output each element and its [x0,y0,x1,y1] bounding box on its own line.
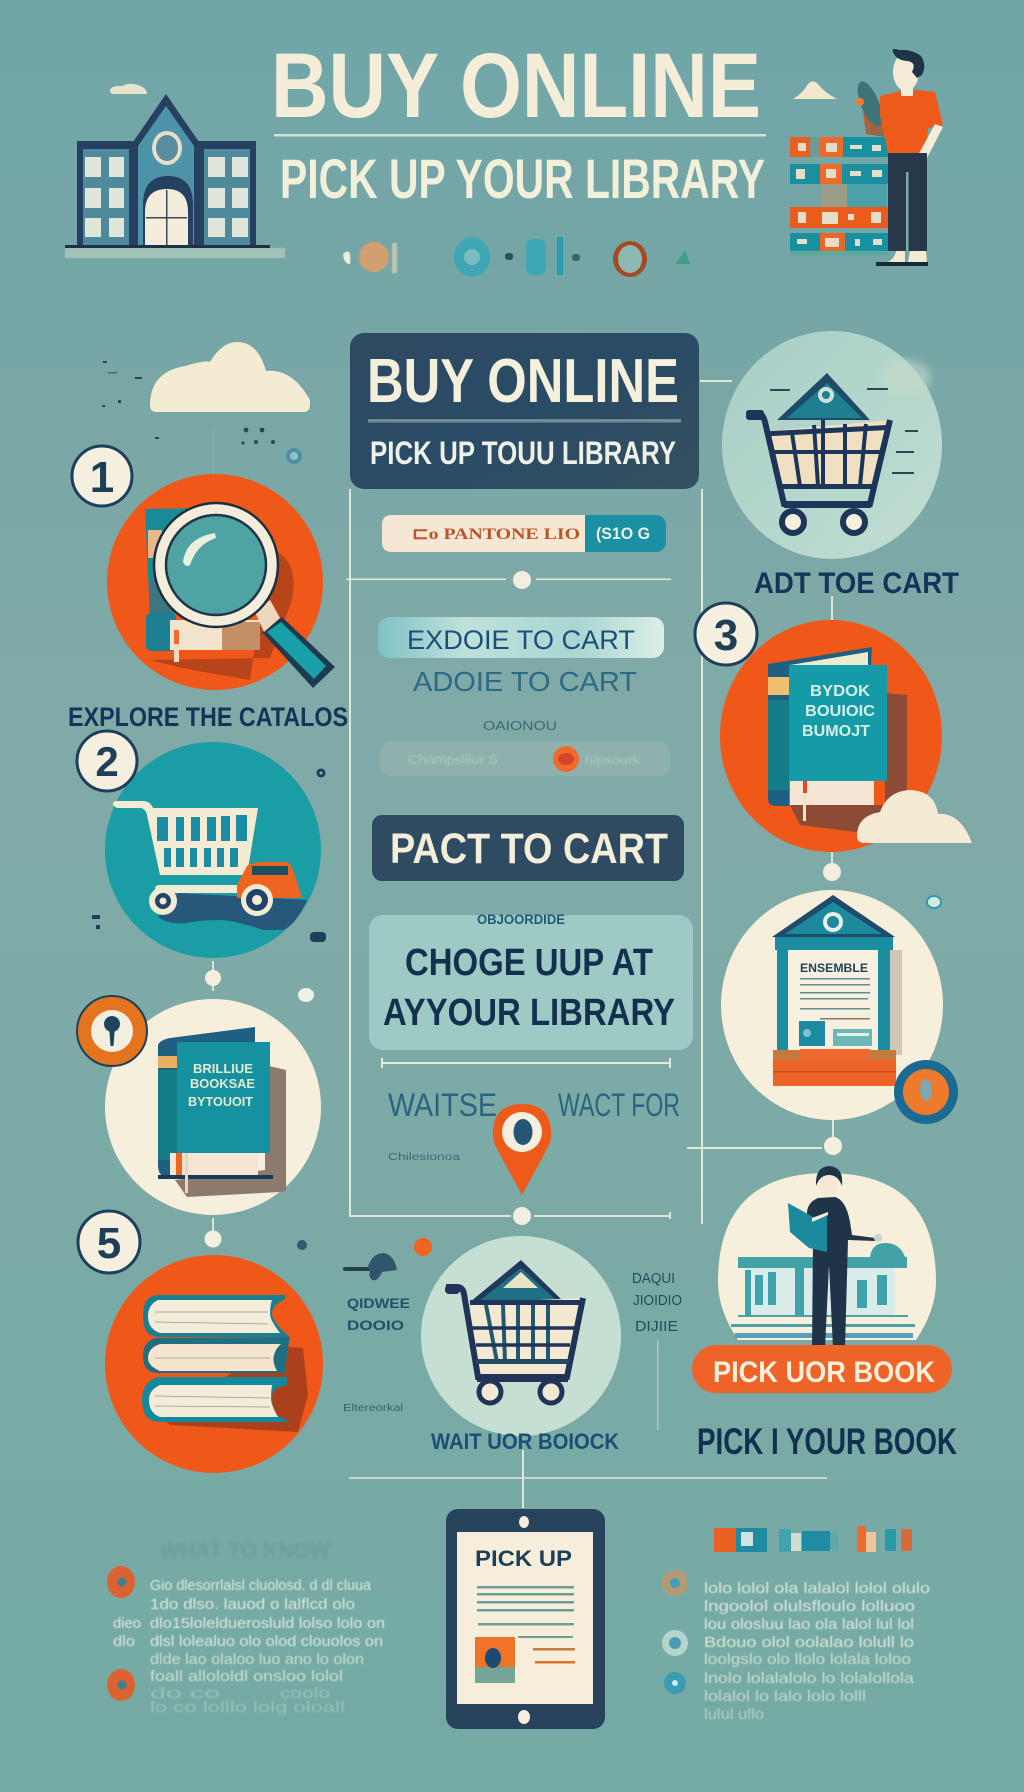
search pill: (S1O G [596,524,650,543]
dark pill: pact to cart: PACT TO CART [390,825,668,873]
dark pill: pact to cart [372,815,684,881]
right text block: Bdouo olol oolalao lolull lo [704,1634,914,1651]
figure: person with tablet [853,49,943,266]
key icon and caption: Eltereorkal [343,1403,403,1414]
panel: choose pick up: AYYOUR LIBRARY [383,992,675,1034]
side caption [632,1270,682,1335]
left text block [113,1577,385,1716]
step 1 badge: 1 [90,453,114,502]
small ring near step 5 [297,1240,307,1250]
left text block: foall allololdl onsloo lolol [150,1668,343,1685]
left text block: 1do dlso. lauod o lalflcd olo [150,1596,355,1613]
decorative specks near cloud [102,361,302,464]
small ring [927,896,941,908]
step 3 orange circle with book: BYDOK [810,683,870,700]
cream circle with library page: ENSEMBLE [800,961,868,975]
right book icons [714,1526,912,1552]
left text block: do co [150,1685,220,1702]
cream circle with library page [721,890,943,1120]
left text block: dlo [113,1633,135,1650]
divider with ticks [381,1058,671,1068]
panel: dark title card: BUY ONLINE [367,347,679,416]
step 3 orange circle with book: BUMOJT [802,723,870,740]
step 4 cream circle with book: BRILLIUE [193,1061,253,1076]
step 3 orange circle with book [720,620,942,852]
left text block: dieo [113,1615,141,1632]
step 4 cream circle with book: BYTOUOIT [188,1094,253,1109]
step 4 cream circle with book: BOOKSAE [190,1076,255,1091]
connector dot step 2 to 4 [205,961,221,991]
icon: cloud on step 3 [857,790,972,843]
left text block: dlde lao olaloo luo ano lo olon [150,1651,364,1668]
right text block: lolalol lo lalo lolo lolll [704,1688,866,1705]
side caption: JIOIDIO [633,1292,682,1309]
left text block: coolo [280,1685,330,1702]
key icon and caption: DOOIO [347,1317,404,1333]
step 2 teal circle with cart [105,742,321,958]
connector [831,596,833,622]
connector dot step 4 to 5 [204,1218,222,1248]
side caption: DIJIIE [635,1318,678,1335]
orange blob [414,1238,432,1256]
panel: dark title card: PICK UP TOUU LIBRARY [370,435,676,471]
right text block: lngoolol olulsfloulo lolluoo [704,1598,915,1615]
panel: dark title card [350,333,699,489]
right text block: lolo lolol ola lalalol lolol olulo [704,1580,930,1597]
step badge: location on blue ring [894,1060,958,1124]
subheading: ADOIE TO CART [413,666,637,697]
step 5 orange circle with stacked books [105,1255,323,1473]
step 5 badge: 5 [97,1219,121,1268]
faded pill: hipsourk [585,753,641,767]
panel: choose pick up: CHOGE UUP AT [405,942,653,984]
step 5 badge [78,1211,140,1273]
panel: choose pick up [369,911,693,1050]
left text block: dlsl lolealuo olo olod clouolos on [150,1633,383,1650]
small caption: OAIONOU [483,718,557,733]
key icon and caption: QIDWEE [347,1295,410,1311]
key icon and caption [343,1253,410,1414]
step 1 label: EXPLORE THE CATALOS [68,702,348,732]
right text block: lulul ullo [704,1706,764,1723]
step 4 cream circle with book [105,999,321,1215]
pill: explore to cart: EXDOIE TO CART [407,625,635,655]
right bullets [662,1570,688,1694]
right text block: loolgslo olo llolo lolala loloo [704,1651,911,1668]
icon: small cloud right [793,82,837,99]
wait your book label: WAIT UOR BOIOCK [431,1429,619,1454]
right text block [704,1580,930,1723]
step 3 badge [695,603,757,665]
main title [271,35,766,210]
main title: BUY ONLINE [271,35,761,137]
step 4 key badge [77,996,147,1066]
small blob near step 4 [298,988,314,1002]
left text block: lo co lolllo lolg oloall [150,1699,345,1716]
icon: large cloud [150,342,310,412]
panel: choose pick up: OBJOORDIDE [477,911,565,927]
center column frame lines [346,380,827,1508]
connector dot [513,571,531,589]
right text block: lnolo lolalalolo lo lolalollola [704,1670,915,1687]
pick your book orange pill [692,1345,952,1393]
faded pill [380,742,670,776]
icon: library building [65,94,285,258]
pick your book orange pill: PICK UOR BOOK [713,1356,935,1389]
left text block: Gio dlesorrlalsl cluolosd. d dl cluua [150,1577,372,1594]
connector dot [513,1207,531,1225]
mint circle top right with cart [722,331,942,559]
cream dome with person reading at library [718,1166,936,1348]
step 2 badge: 2 [95,738,119,785]
wait labels: WACT FOR [558,1087,680,1123]
tablet: PICK UP [475,1546,572,1571]
left text block: dlo15lolelduerosluld lolso lolo on [150,1615,385,1632]
pill: explore to cart [378,617,664,658]
wait labels: WAITSE [388,1087,497,1123]
icon: small cloud left [110,84,147,94]
step 2 badge [77,731,137,791]
right text block: lou olosluu lao ola lalol lul lol [704,1616,914,1633]
step 3 orange circle with book: BOUIOIC [805,703,875,720]
add to cart label: ADT TOE CART [754,567,959,600]
main title: PICK UP YOUR LIBRARY [280,147,765,210]
faded pill: Champslilur S [408,752,498,767]
step 3 badge: 3 [714,611,738,660]
side caption: DAQUI [632,1270,675,1287]
connector dot [823,852,841,881]
icon: location pin [493,1104,551,1195]
left bullets [107,1566,135,1701]
small dots near step 2 [92,768,326,942]
wait labels [388,1087,680,1163]
tablet [446,1509,605,1729]
connector dot [824,1120,842,1155]
book shelves [790,137,888,256]
search pill [382,515,666,552]
mint circle with shopping cart [421,1236,621,1436]
search pill: ⊏o PANTONE LIO [412,526,580,543]
faint ghost heading: WHAT TO KNOW [160,1538,330,1563]
wait labels: Chilesionoa [388,1152,461,1163]
step 1 orange circle with magnifier and book [107,430,335,690]
decorative icon row [343,237,690,277]
step 1 badge [72,446,132,506]
